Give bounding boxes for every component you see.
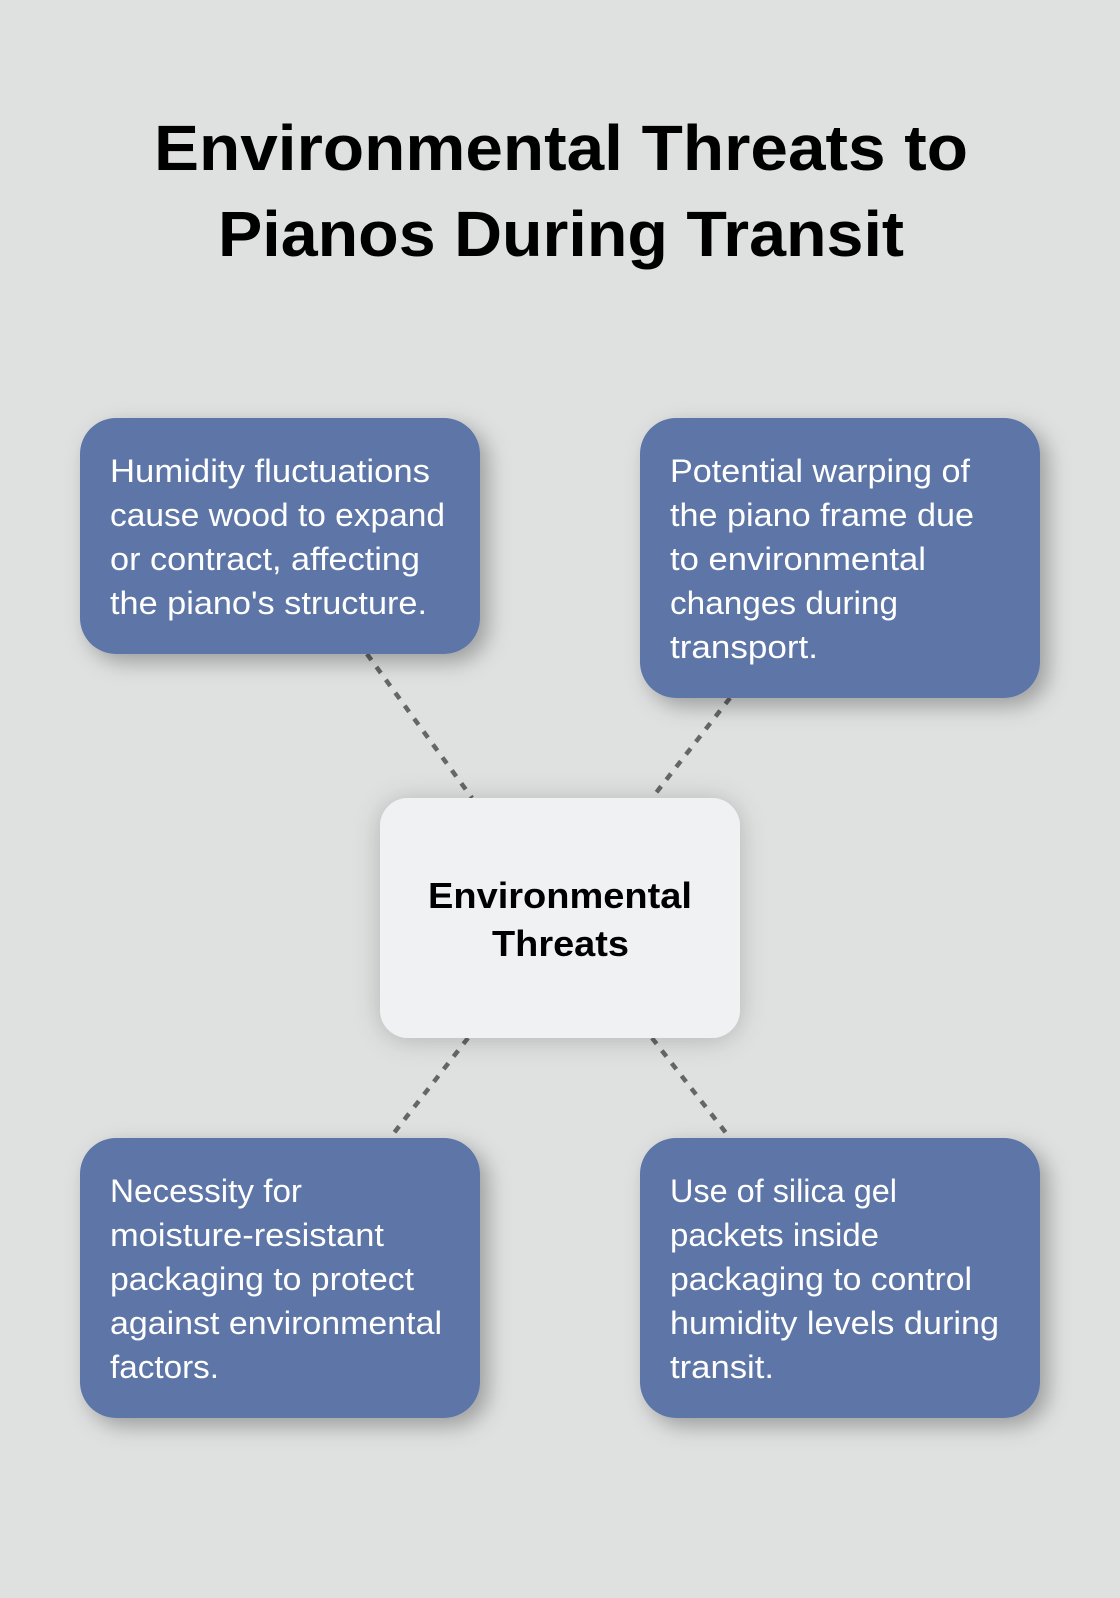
panel: humidity fluctuations: cause wood to expand [110, 497, 445, 533]
panel: moisture-resistant packaging: against environmental [110, 1305, 442, 1341]
panel: silica gel packets: Use of silica gel [670, 1173, 897, 1209]
panel: humidity fluctuations: or contract, affecting [110, 541, 420, 577]
panel: humidity fluctuations: the piano's structure. [110, 585, 427, 621]
connector: bottom-left card to centre [390, 1038, 468, 1138]
panel: frame warping: transport. [670, 629, 818, 665]
panel: centre topic: Threats [492, 923, 629, 964]
panel: frame warping [640, 418, 1040, 698]
connector: bottom-right card to centre [652, 1038, 730, 1138]
panel: frame warping: changes during [670, 585, 898, 621]
title: Environmental Threats to [154, 112, 968, 184]
title [154, 112, 968, 270]
panel: silica gel packets: packaging to control [670, 1261, 972, 1297]
connector: top-left card to centre [367, 654, 472, 798]
panel: moisture-resistant packaging: Necessity for [110, 1173, 302, 1209]
panel: moisture-resistant packaging: factors. [110, 1349, 219, 1385]
panel: silica gel packets [640, 1138, 1040, 1418]
panel: centre topic: Environmental [428, 875, 692, 916]
panel: centre topic [380, 798, 740, 1038]
panel: silica gel packets: humidity levels during [670, 1305, 999, 1341]
panel: silica gel packets: packets inside [670, 1217, 879, 1253]
panel: moisture-resistant packaging: packaging to protect [110, 1261, 414, 1297]
panel: humidity fluctuations: Humidity fluctuations [110, 453, 430, 489]
title: Pianos During Transit [218, 198, 904, 270]
panel: frame warping: the piano frame due [670, 497, 974, 533]
panel: moisture-resistant packaging: moisture-resistant [110, 1217, 384, 1253]
panel: frame warping: to environmental [670, 541, 926, 577]
connector: top-right card to centre [652, 698, 730, 798]
panel: moisture-resistant packaging [80, 1138, 480, 1418]
panel: frame warping: Potential warping of [670, 453, 970, 489]
panel: humidity fluctuations [80, 418, 480, 654]
panel: silica gel packets: transit. [670, 1349, 774, 1385]
